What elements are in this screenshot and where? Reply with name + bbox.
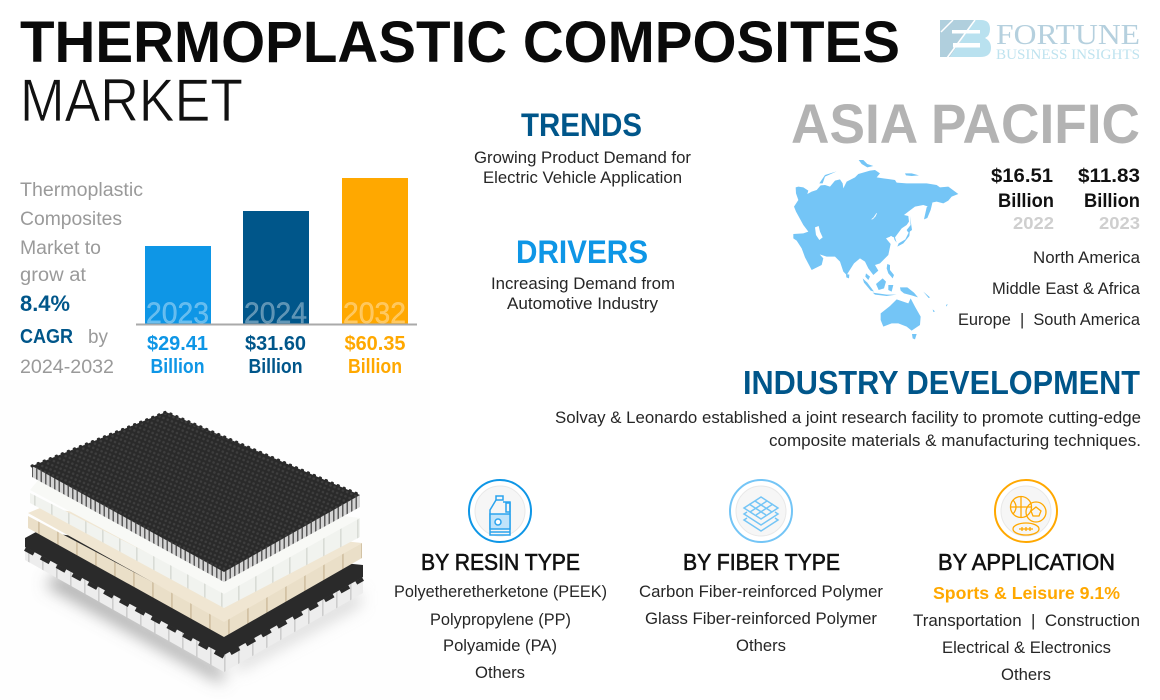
panel: industry development: INDUSTRY DEVELOPMENT bbox=[743, 364, 1140, 401]
regional values: Billion bbox=[1084, 190, 1140, 212]
panel: by fiber type: Carbon Fiber-reinforced Polymer bbox=[639, 583, 884, 601]
text: market growth CAGR: Thermoplastic bbox=[20, 180, 143, 201]
bar: 2023: Billion bbox=[150, 356, 204, 378]
panel: by resin type: Polyamide (PA) bbox=[443, 637, 557, 655]
logo: Fortune Business Insights bbox=[940, 19, 1140, 63]
panel: by fiber type: BY FIBER TYPE bbox=[683, 549, 840, 575]
panel: by application bbox=[913, 549, 1140, 684]
bar: 2023 bbox=[145, 246, 211, 378]
panel: industry development: composite materials & manufacturing techniques. bbox=[769, 432, 1141, 450]
list: other regions: North America bbox=[1033, 249, 1141, 267]
panel: by application: BY APPLICATION bbox=[938, 549, 1115, 575]
panel: by fiber type bbox=[639, 549, 884, 655]
icon: fiber layers bbox=[730, 480, 792, 542]
title bbox=[20, 10, 900, 134]
bar: 2024: 2024 bbox=[244, 297, 307, 330]
beige layer bbox=[28, 508, 362, 637]
bar: 2024 bbox=[243, 211, 309, 378]
list: other regions bbox=[958, 249, 1141, 329]
panel: by resin type: Others bbox=[475, 664, 525, 682]
bar: 2024: Billion bbox=[248, 356, 302, 378]
panel: trends: Electric Vehicle Application bbox=[483, 169, 682, 187]
text: market growth CAGR: CAGR bbox=[20, 325, 73, 348]
title: THERMOPLASTIC COMPOSITES bbox=[20, 10, 900, 75]
text: market growth CAGR: 2024-2032 bbox=[20, 357, 114, 378]
panel: trends bbox=[474, 107, 692, 187]
bar: 2024: $31.60 bbox=[245, 333, 306, 355]
bar: 2032 bbox=[342, 178, 408, 378]
title: MARKET bbox=[20, 67, 243, 134]
text: market growth CAGR: grow at bbox=[20, 265, 87, 286]
panel: industry development bbox=[555, 364, 1141, 450]
bar: 2023: $29.41 bbox=[147, 333, 208, 355]
panel: by application: Electrical & Electronics bbox=[942, 639, 1111, 657]
panel: by fiber type: Glass Fiber-reinforced Polymer bbox=[645, 610, 878, 628]
regional values: $16.51 bbox=[991, 165, 1053, 187]
regional values: 2023 bbox=[1099, 213, 1140, 233]
white layer bbox=[30, 478, 360, 608]
text: market growth CAGR: 8.4% bbox=[20, 291, 70, 316]
logo: Fortune Business Insights: FORTUNE bbox=[996, 19, 1140, 51]
panel: by resin type bbox=[394, 549, 607, 682]
panel: industry development: Solvay & Leonardo established a joint research facility to promote cutting-edge bbox=[555, 409, 1141, 427]
text: market growth CAGR: Composites bbox=[20, 209, 122, 230]
icon: bottle bbox=[469, 480, 531, 542]
list: other regions: Middle East & Africa bbox=[992, 280, 1141, 298]
panel: by fiber type: Others bbox=[736, 637, 786, 655]
bar chart: market size bbox=[136, 178, 417, 378]
text: market growth CAGR bbox=[20, 180, 143, 378]
text: market growth CAGR: by bbox=[88, 327, 108, 348]
image: stacked composite panels bbox=[0, 380, 430, 700]
regional values bbox=[991, 165, 1140, 233]
regional values: Billion bbox=[998, 190, 1054, 212]
panel: by application: Others bbox=[1001, 666, 1051, 684]
bar: 2023: 2023 bbox=[146, 297, 209, 330]
map: Asia Pacific bbox=[793, 160, 958, 339]
panel: trends: Growing Product Demand for bbox=[474, 149, 692, 167]
panel: by resin type: Polypropylene (PP) bbox=[430, 611, 571, 629]
list: other regions: Europe | South America bbox=[958, 311, 1141, 329]
panel: by resin type: BY RESIN TYPE bbox=[421, 549, 580, 575]
panel: drivers: Automotive Industry bbox=[507, 295, 659, 313]
panel: by resin type: Polyetheretherketone (PEEK) bbox=[394, 583, 607, 601]
top black layer bbox=[32, 412, 360, 582]
text: market growth CAGR: Market to bbox=[20, 238, 101, 259]
panel: drivers: Increasing Demand from bbox=[491, 275, 675, 293]
bottom layer bbox=[25, 532, 363, 672]
panel: trends: TRENDS bbox=[521, 107, 642, 143]
panel: by application: Sports & Leisure 9.1% bbox=[933, 583, 1120, 603]
bar: 2032: Billion bbox=[348, 356, 402, 378]
regional values: $11.83 bbox=[1078, 165, 1140, 187]
bar: 2032: $60.35 bbox=[344, 333, 406, 355]
panel: by application: Transportation | Construction bbox=[913, 612, 1140, 630]
regional values: 2022 bbox=[1013, 213, 1054, 233]
logo: Fortune Business Insights: BUSINESS INSIGHTS bbox=[996, 47, 1140, 63]
icon: sports balls bbox=[995, 480, 1057, 542]
panel: drivers: DRIVERS bbox=[516, 234, 648, 270]
bar: 2032: 2032 bbox=[343, 297, 406, 330]
shadow bbox=[45, 572, 360, 684]
heading: Asia Pacific: ASIA PACIFIC bbox=[791, 92, 1140, 155]
panel: drivers bbox=[491, 234, 675, 313]
